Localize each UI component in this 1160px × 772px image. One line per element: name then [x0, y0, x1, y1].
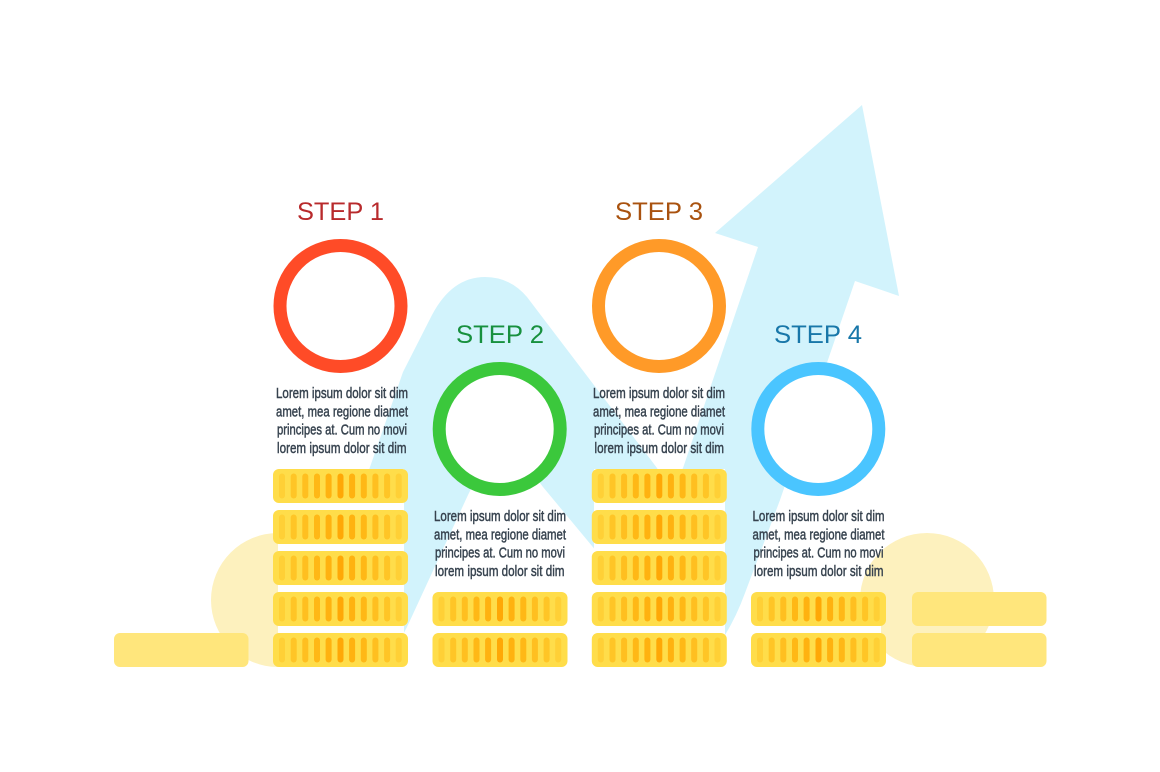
step 4 ring [758, 368, 879, 490]
step 4 text: lorem ipsum dolor sit dim [754, 564, 884, 580]
step 4 column [751, 321, 886, 667]
step 1 ring [280, 246, 401, 366]
step 2 heading: STEP 2 [456, 321, 544, 349]
step 3 text: Lorem ipsum dolor sit dim [593, 386, 725, 402]
step 1 text: amet, mea regione diamet [276, 404, 408, 420]
step 2 coin stack [432, 592, 568, 667]
step 1 text [276, 386, 408, 457]
step 3 text: principes at. Cum no movi [594, 423, 724, 439]
step 2 ring [439, 368, 560, 490]
step 1 column [273, 198, 408, 667]
step 4 coin stack [751, 592, 886, 667]
step 1 text: principes at. Cum no movi [277, 423, 407, 439]
step 2 text: Lorem ipsum dolor sit dim [434, 509, 566, 525]
step 3 coin stack [592, 469, 727, 667]
step 4 heading: STEP 4 [774, 321, 862, 349]
pale coin stack right [912, 592, 1046, 667]
step 1 heading: STEP 1 [297, 198, 384, 226]
step 4 text: Lorem ipsum dolor sit dim [752, 509, 884, 525]
rising arrow [320, 105, 899, 665]
background circle left [211, 533, 345, 667]
step 2 text: principes at. Cum no movi [435, 546, 565, 562]
step 1 text: lorem ipsum dolor sit dim [277, 441, 406, 457]
step 3 text: amet, mea regione diamet [593, 404, 725, 420]
step 3 text [593, 386, 725, 457]
pale coin left [114, 633, 248, 667]
step 1 coin stack [273, 469, 408, 667]
step 4 text: amet, mea regione diamet [752, 527, 884, 543]
background circle right [860, 533, 994, 667]
step 4 text [752, 509, 884, 580]
step 2 text [434, 509, 566, 580]
step 4 text: principes at. Cum no movi [754, 546, 884, 562]
step 2 text: lorem ipsum dolor sit dim [435, 564, 564, 580]
step 2 column [432, 321, 568, 667]
step 2 text: amet, mea regione diamet [434, 527, 566, 543]
step 3 column [592, 198, 727, 667]
step 3 heading: STEP 3 [615, 198, 703, 226]
step 3 ring [598, 246, 720, 366]
step 3 text: lorem ipsum dolor sit dim [594, 441, 724, 457]
step 1 text: Lorem ipsum dolor sit dim [276, 386, 408, 402]
